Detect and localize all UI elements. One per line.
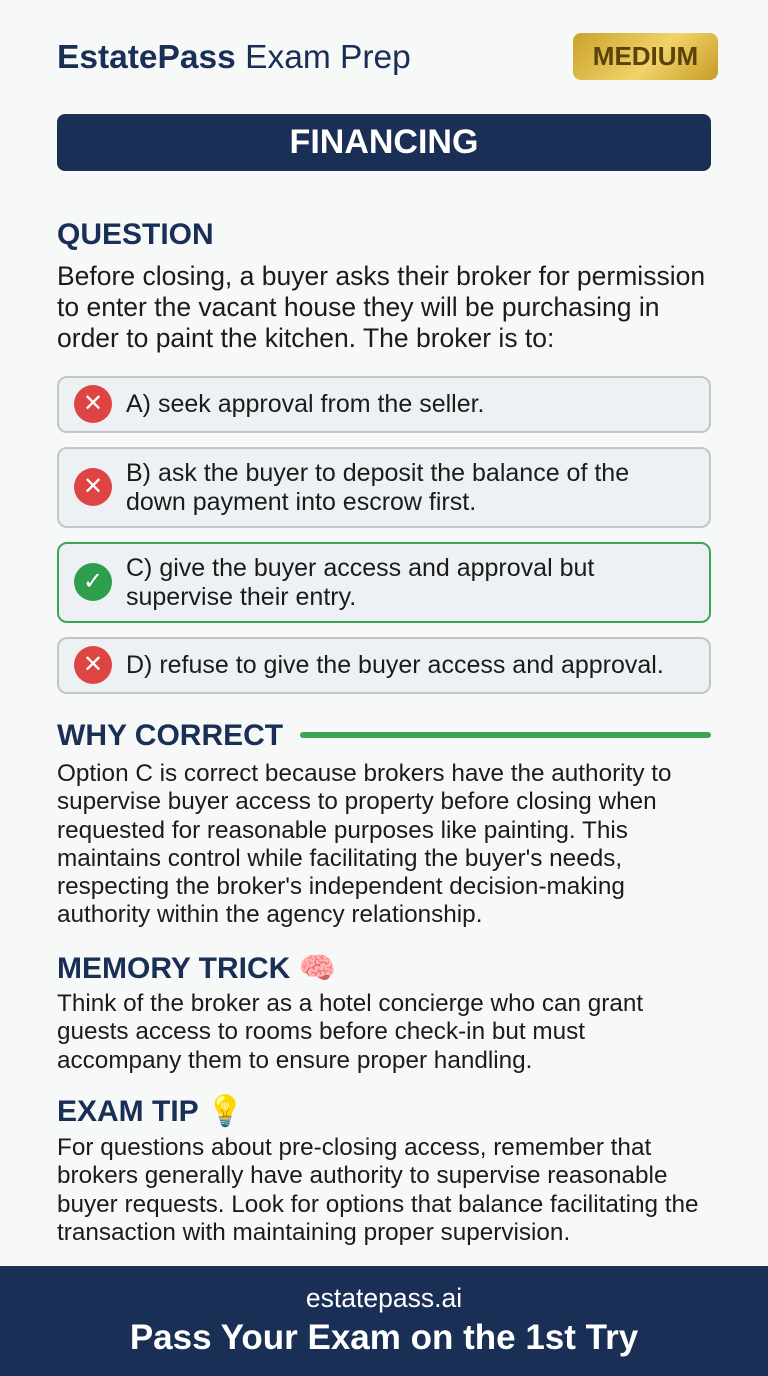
badge: difficulty: MEDIUM — [593, 41, 698, 71]
option D: ✕ — [83, 651, 103, 678]
option C correct: ✓ — [83, 568, 103, 595]
memory text: accompany them to ensure proper handling. — [57, 1047, 532, 1074]
header brand: EstatePass Exam Prep — [57, 39, 411, 76]
explanation text: respecting the broker's independent decision-making — [57, 873, 625, 900]
option B: B) ask the buyer to deposit the balance of the — [126, 459, 629, 487]
option A: ✕ — [83, 390, 103, 417]
explanation text: authority within the agency relationship. — [57, 901, 482, 928]
option C correct — [57, 542, 711, 623]
exam tip text: For questions about pre-closing access, remember that — [57, 1134, 651, 1161]
option D: D) refuse to give the buyer access and approval. — [126, 651, 664, 679]
footer — [0, 1266, 768, 1376]
category banner: FINANCING — [290, 123, 478, 161]
explanation text: supervise buyer access to property before closing when — [57, 788, 657, 815]
option A — [57, 376, 711, 433]
green rule — [300, 732, 711, 738]
footer tagline: Pass Your Exam on the 1st Try — [130, 1318, 638, 1357]
memory text — [57, 990, 643, 1074]
explanation text — [57, 760, 671, 928]
explanation text: maintains control while facilitating the buyer's needs, — [57, 845, 622, 872]
exam tip text: transaction with maintaining proper supervision. — [57, 1219, 570, 1246]
heading: question: QUESTION — [57, 218, 214, 251]
exam tip text: buyer requests. Look for options that balance facilitating the — [57, 1191, 699, 1218]
question text: to enter the vacant house they will be purchasing in — [57, 292, 660, 322]
heading: why correct: WHY CORRECT — [57, 719, 283, 752]
question text — [57, 261, 705, 353]
option A: A) seek approval from the seller. — [126, 390, 484, 418]
exam tip text: brokers generally have authority to supervise reasonable — [57, 1162, 667, 1189]
heading: memory trick: MEMORY TRICK 🧠 — [57, 952, 336, 985]
question text: Before closing, a buyer asks their broker for permission — [57, 261, 705, 291]
category banner — [57, 114, 711, 171]
memory text: guests access to rooms before check-in but must — [57, 1018, 585, 1045]
question text: order to paint the kitchen. The broker is to: — [57, 323, 554, 353]
option B: down payment into escrow first. — [126, 488, 476, 516]
footer url: estatepass.ai — [306, 1283, 462, 1313]
explanation text: Option C is correct because brokers have the authority to — [57, 760, 671, 787]
option B: ✕ — [83, 473, 103, 500]
option C correct: C) give the buyer access and approval but — [126, 554, 594, 582]
option D — [57, 637, 711, 694]
heading: exam tip: EXAM TIP 💡 — [57, 1095, 244, 1128]
option C correct: supervise their entry. — [126, 583, 356, 611]
option B — [57, 447, 711, 528]
memory text: Think of the broker as a hotel concierge who can grant — [57, 990, 643, 1017]
exam tip text — [57, 1134, 699, 1246]
explanation text: requested for reasonable purposes like painting. This — [57, 817, 628, 844]
badge: difficulty — [573, 33, 718, 80]
